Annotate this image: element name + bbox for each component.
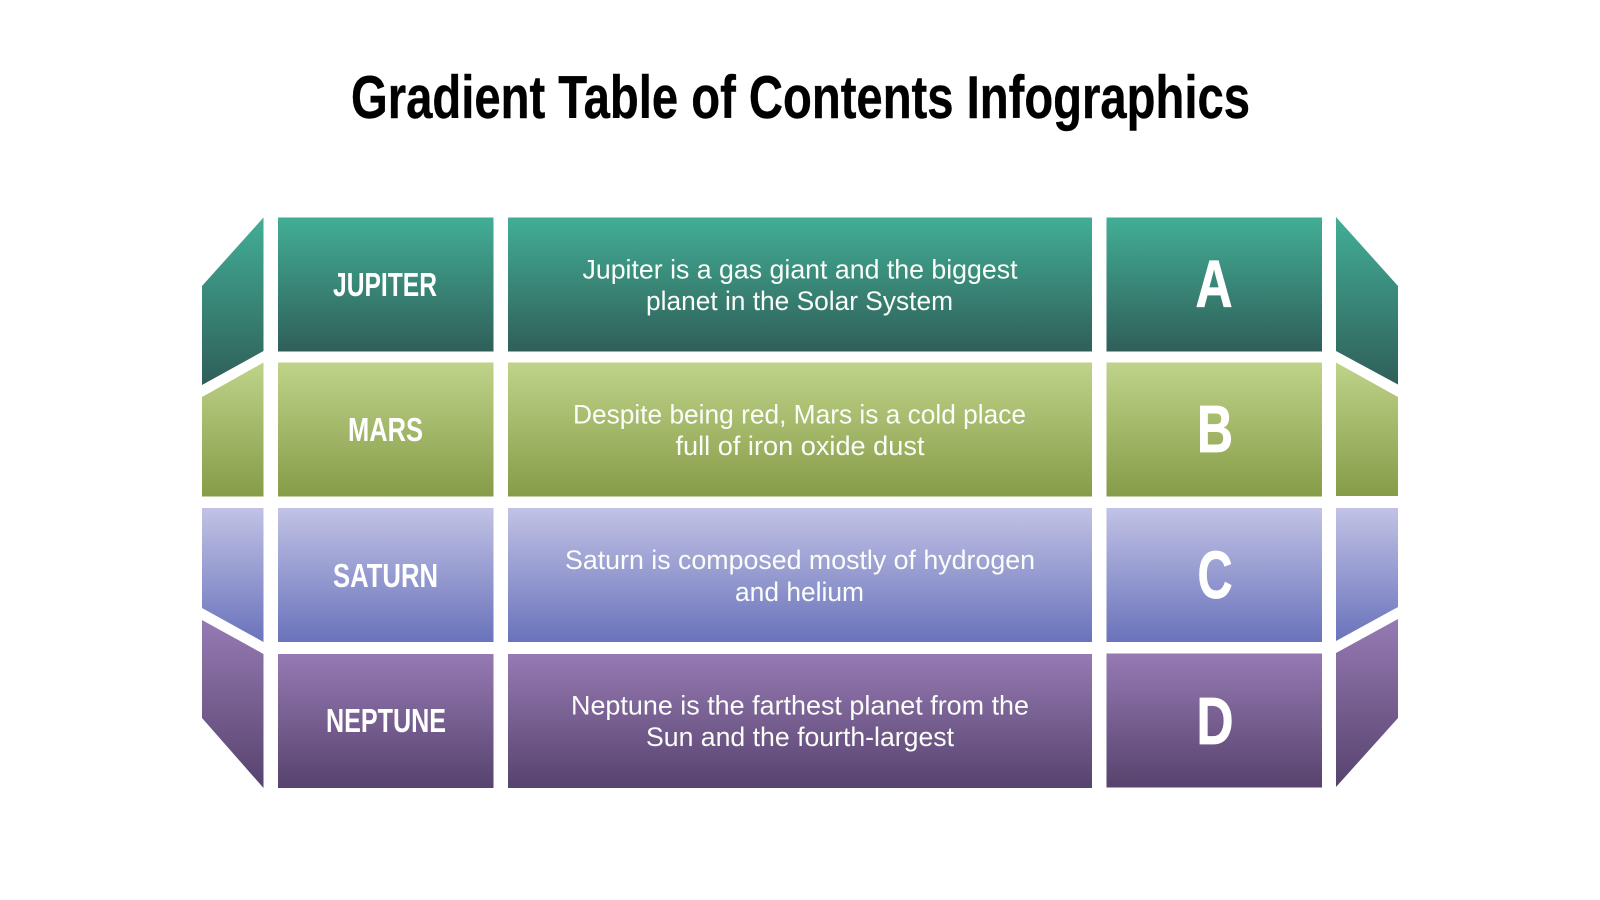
panel: right side wedges: [1336, 217, 1398, 787]
description cell: Neptune: Sun and the fourth-largest: [646, 722, 954, 752]
letter cell: B: [1106, 362, 1322, 496]
name cell: Neptune: NEPTUNE: [326, 702, 446, 739]
wedge: Mars left: [202, 362, 264, 496]
name cell: Jupiter: JUPITER: [333, 266, 437, 303]
name cell: Mars: MARS: [348, 411, 423, 448]
name cell: Saturn: [278, 508, 494, 642]
description cell: Jupiter: planet in the Solar System: [646, 286, 953, 316]
description cell: Neptune: Neptune is the farthest planet from the: [571, 690, 1029, 720]
letter cell: D: D: [1196, 684, 1234, 759]
letter cell: C: C: [1198, 538, 1232, 613]
name cell: Mars: [278, 362, 494, 496]
row: Jupiter: [278, 218, 1322, 352]
name cell: Jupiter: [278, 218, 494, 352]
title: Gradient Table of Contents Infographics: [351, 64, 1250, 131]
description cell: Jupiter: Jupiter is a gas giant and the biggest: [582, 254, 1018, 284]
description cell: Saturn: [508, 508, 1092, 642]
wedge: Jupiter right: [1336, 217, 1398, 384]
description cell: Jupiter: [508, 218, 1092, 352]
row: Mars: [278, 362, 1322, 496]
letter cell: B: B: [1197, 392, 1233, 467]
wedge: Neptune left: [202, 620, 264, 788]
wedge: Mars right: [1336, 362, 1398, 496]
wedge: Saturn right: [1336, 508, 1398, 641]
row: Saturn: [278, 508, 1322, 642]
name cell: Saturn: SATURN: [333, 557, 438, 594]
letter cell: C: [1106, 508, 1322, 642]
description cell: Saturn: Saturn is composed mostly of hydrogen: [565, 545, 1035, 575]
wedge: Neptune right: [1336, 619, 1398, 787]
letter cell: D: [1106, 654, 1322, 788]
description cell: Mars: [508, 362, 1092, 496]
letter cell: A: A: [1196, 247, 1232, 322]
description cell: Saturn: and helium: [735, 577, 864, 607]
panel: left side wedges: [202, 218, 264, 788]
description cell: Mars: Despite being red, Mars is a cold place: [573, 400, 1026, 430]
letter cell: A: [1106, 218, 1322, 352]
wedge: Jupiter left: [202, 218, 264, 385]
wedge: Saturn left: [202, 508, 264, 642]
description cell: Neptune: [508, 654, 1092, 788]
name cell: Neptune: [278, 654, 494, 788]
description cell: Mars: full of iron oxide dust: [676, 431, 925, 461]
row: Neptune: [278, 654, 1322, 788]
